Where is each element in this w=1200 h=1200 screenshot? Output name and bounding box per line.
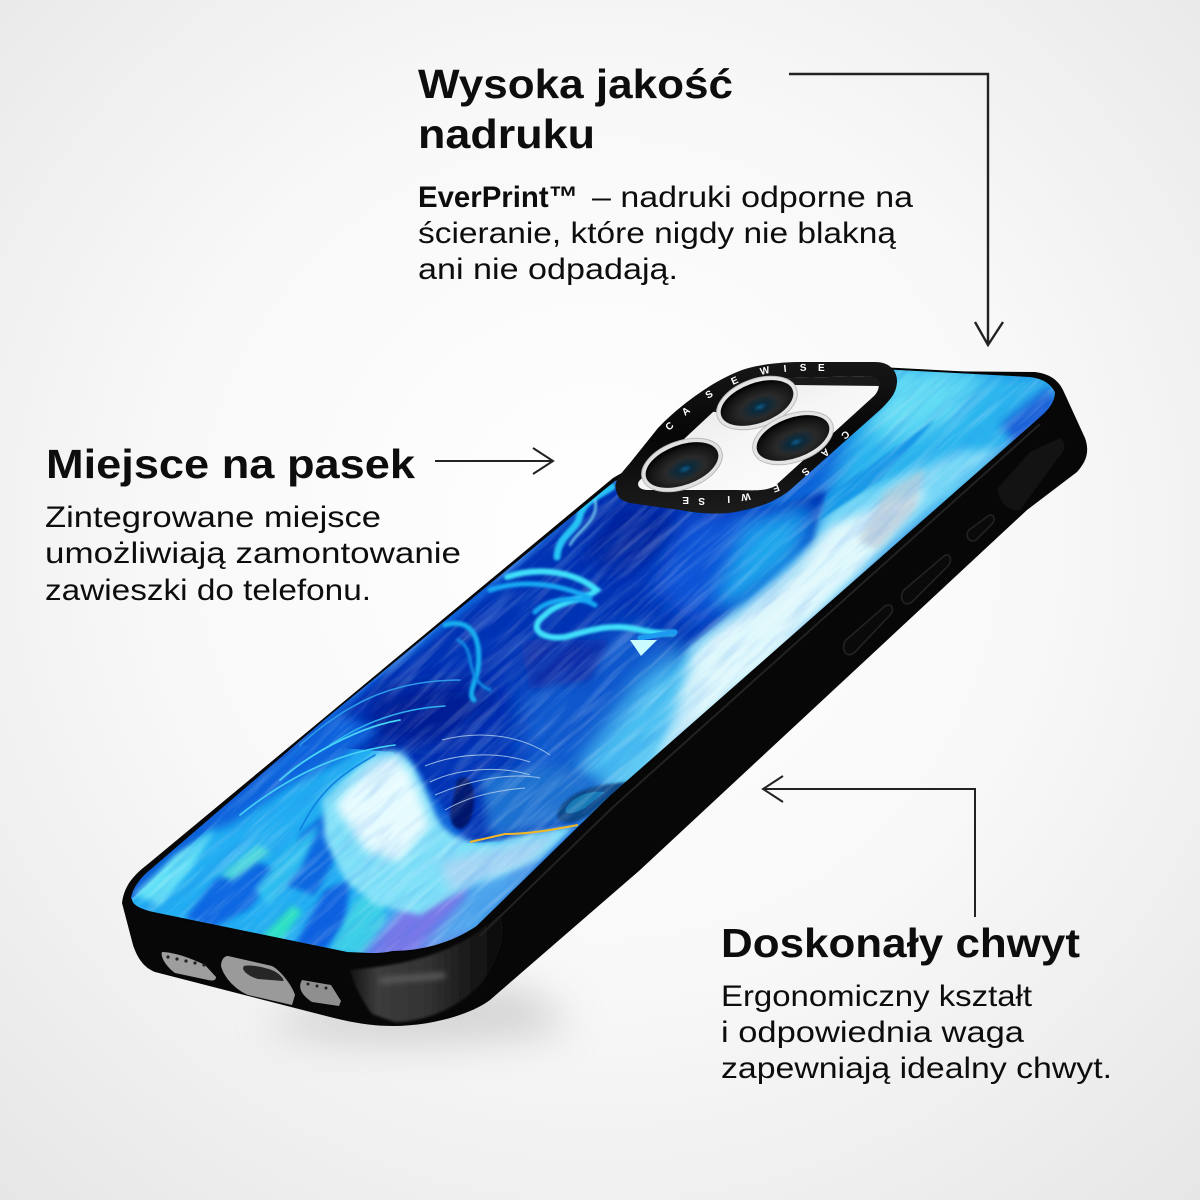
arrow: strap mount — [435, 448, 553, 474]
text: strap mount description — [45, 501, 461, 607]
text: print quality description: – nadruki odporne na — [592, 181, 913, 214]
lens left — [634, 428, 730, 502]
yellow line — [470, 825, 578, 842]
bump lettering: S — [800, 363, 807, 374]
bump lettering: S — [704, 389, 716, 402]
cyan swirls — [240, 487, 675, 830]
left speaker grille — [162, 952, 216, 981]
callout: grip — [721, 920, 1112, 1085]
phone in patterned case — [122, 362, 1088, 1026]
white blob — [322, 752, 575, 915]
text: grip description: zapewniają idealny chwyt. — [721, 1052, 1112, 1085]
bump lettering: I — [727, 493, 730, 504]
lower-left painted strokes — [125, 712, 540, 965]
bump lettering: A — [819, 446, 831, 459]
text: print quality description: ścieranie, które nigdy nie blakną — [418, 217, 896, 250]
dark muzzle detail — [451, 777, 474, 829]
camera bump — [615, 362, 897, 514]
arrow: grip — [763, 776, 975, 917]
camera window — [638, 376, 879, 490]
phone case artwork — [131, 370, 1055, 953]
deep blue face — [250, 483, 826, 845]
glossy bottom corner highlight — [350, 914, 503, 1022]
right speaker grille — [300, 980, 341, 1006]
side buttons — [844, 515, 994, 655]
heading: strap mount: Miejsce na pasek — [46, 441, 415, 487]
cyan wedge — [820, 420, 935, 520]
text: strap mount description: umożliwiają zamontowanie — [45, 537, 461, 570]
top right cyan — [820, 360, 1070, 520]
bump lettering: C — [664, 420, 676, 433]
bump lettering: W — [759, 365, 771, 378]
light fur area — [491, 444, 1000, 842]
nose — [557, 782, 628, 823]
text: strap mount description: Zintegrowane miejsce — [45, 501, 381, 534]
bump lettering: E — [770, 481, 781, 494]
bump lettering — [664, 363, 851, 506]
bump lettering: I — [783, 364, 787, 375]
arrow: print quality — [789, 74, 1003, 345]
bump lettering: E — [818, 363, 825, 374]
text: print quality description: EverPrint™ — [418, 181, 578, 214]
heading: print quality — [418, 61, 733, 157]
side rim highlight — [480, 424, 1040, 936]
bump lettering: S — [799, 465, 811, 478]
lens right — [745, 401, 841, 475]
charging port — [221, 956, 295, 1005]
callout: print quality — [418, 61, 913, 286]
text: print quality description — [418, 181, 913, 286]
heading: print quality: nadruku — [418, 111, 595, 157]
bump lettering: S — [698, 495, 705, 506]
texture strokes — [131, 370, 1055, 953]
bump lettering: E — [682, 494, 689, 505]
bump lettering: W — [740, 490, 751, 502]
text: grip description: Ergonomiczny kształt — [721, 980, 1033, 1013]
case body — [122, 370, 1087, 1026]
bump lettering: A — [680, 405, 693, 418]
text: strap mount description: zawieszki do telefonu. — [45, 574, 371, 607]
text: grip description: i odpowiednia waga — [721, 1016, 1024, 1049]
whiskers — [425, 735, 550, 810]
side switch — [998, 438, 1064, 510]
text: grip description — [721, 980, 1112, 1085]
heading: grip: Doskonały chwyt — [721, 920, 1080, 966]
heading: print quality: Wysoka jakość — [418, 61, 733, 107]
screen edge rim — [131, 368, 1056, 954]
phone drop shadow — [270, 986, 570, 1042]
text: print quality description: ani nie odpadają. — [418, 253, 678, 286]
bump lettering: C — [839, 428, 851, 441]
bump lettering: E — [730, 375, 741, 388]
callout: strap mount — [45, 441, 461, 607]
lens top — [709, 366, 805, 440]
eye highlight — [630, 640, 657, 656]
